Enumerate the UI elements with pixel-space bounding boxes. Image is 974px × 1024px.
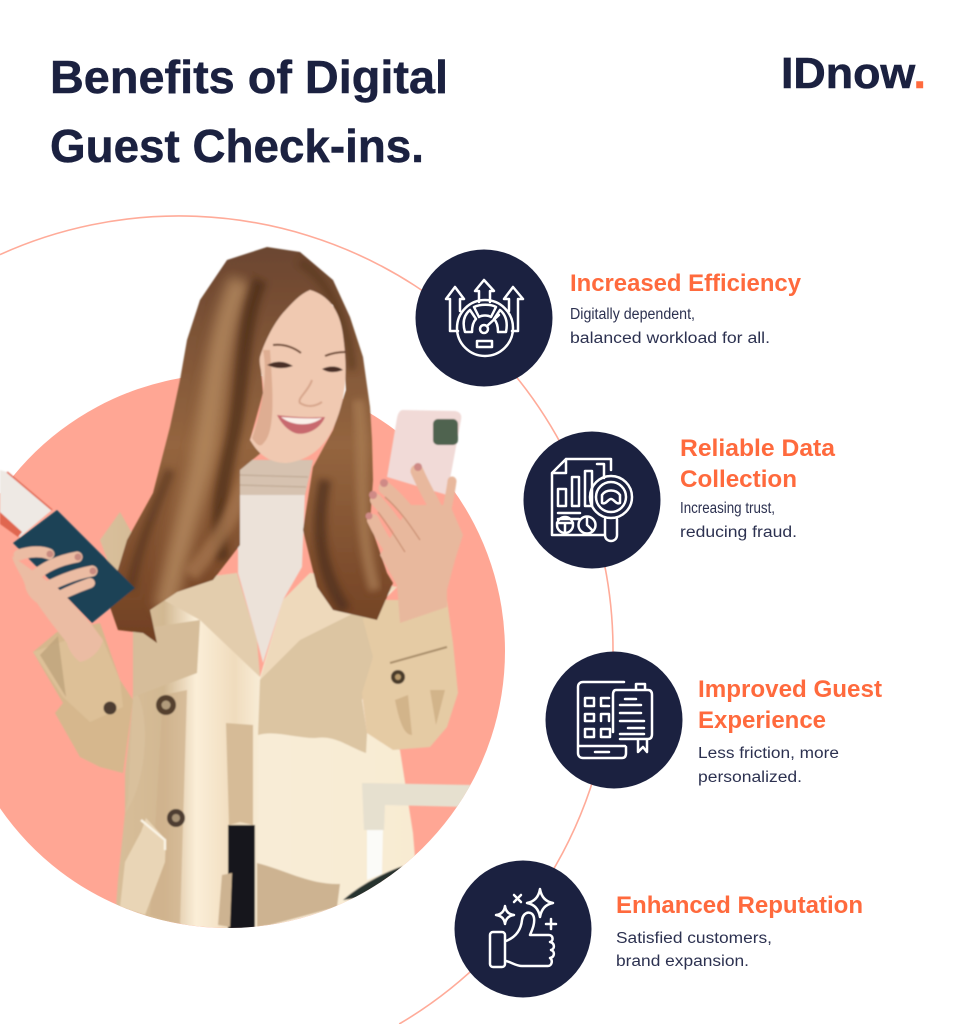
right sleeve bbox=[362, 600, 458, 750]
passport bbox=[13, 510, 135, 623]
heading and text: Digitally dependent, bbox=[570, 306, 695, 323]
trench coat bbox=[100, 512, 420, 960]
icon: report with magnifier bbox=[524, 432, 660, 568]
icon: tablet with document bbox=[546, 652, 682, 788]
heading and text bbox=[698, 676, 882, 786]
heading and text: Increased Efficiency bbox=[570, 270, 802, 297]
heading and text: Enhanced Reputation bbox=[616, 892, 863, 919]
hand palm and wrist bbox=[12, 556, 103, 662]
suitcase handle bbox=[343, 783, 472, 900]
item: Improved Guest Experience bbox=[546, 652, 882, 788]
hand holding phone bbox=[366, 463, 463, 623]
connecting arc bbox=[0, 216, 613, 1024]
heading and text: Increasing trust, bbox=[680, 500, 775, 517]
fingers over passport bbox=[19, 550, 96, 603]
heading and text bbox=[680, 435, 836, 541]
heading and text: Reliable Data bbox=[680, 435, 836, 462]
heading and text: Satisfied customers, bbox=[616, 930, 772, 947]
salmon circle backdrop bbox=[0, 374, 505, 928]
heading and text: balanced workload for all. bbox=[570, 330, 770, 347]
heading and text: reducing fraud. bbox=[680, 524, 797, 541]
ticket bbox=[0, 470, 52, 537]
photo: woman with phone and passport bbox=[0, 247, 472, 960]
sweater bbox=[238, 460, 313, 663]
item: Increased Efficiency bbox=[416, 250, 802, 386]
heading and text: Experience bbox=[698, 707, 826, 734]
title bbox=[50, 51, 448, 172]
heading and text bbox=[570, 270, 802, 347]
logo: IDnow: IDnow. bbox=[781, 49, 926, 98]
heading and text: Less friction, more bbox=[698, 745, 839, 762]
face bbox=[250, 290, 346, 463]
heading and text: Improved Guest bbox=[698, 676, 882, 703]
hair bbox=[110, 247, 393, 643]
icon: speedometer with arrows bbox=[416, 250, 552, 386]
item: Enhanced Reputation bbox=[454, 860, 863, 998]
left sleeve bbox=[33, 623, 133, 773]
title: Benefits of Digital bbox=[50, 51, 448, 103]
phone bbox=[387, 410, 461, 495]
item: Reliable Data Collection bbox=[524, 432, 836, 568]
title: Guest Check-ins. bbox=[50, 120, 424, 172]
icon: thumbs up with sparkles bbox=[454, 860, 592, 998]
heading and text: personalized. bbox=[698, 769, 802, 786]
heading and text bbox=[616, 892, 863, 970]
heading and text: brand expansion. bbox=[616, 953, 749, 970]
heading and text: Collection bbox=[680, 466, 797, 493]
